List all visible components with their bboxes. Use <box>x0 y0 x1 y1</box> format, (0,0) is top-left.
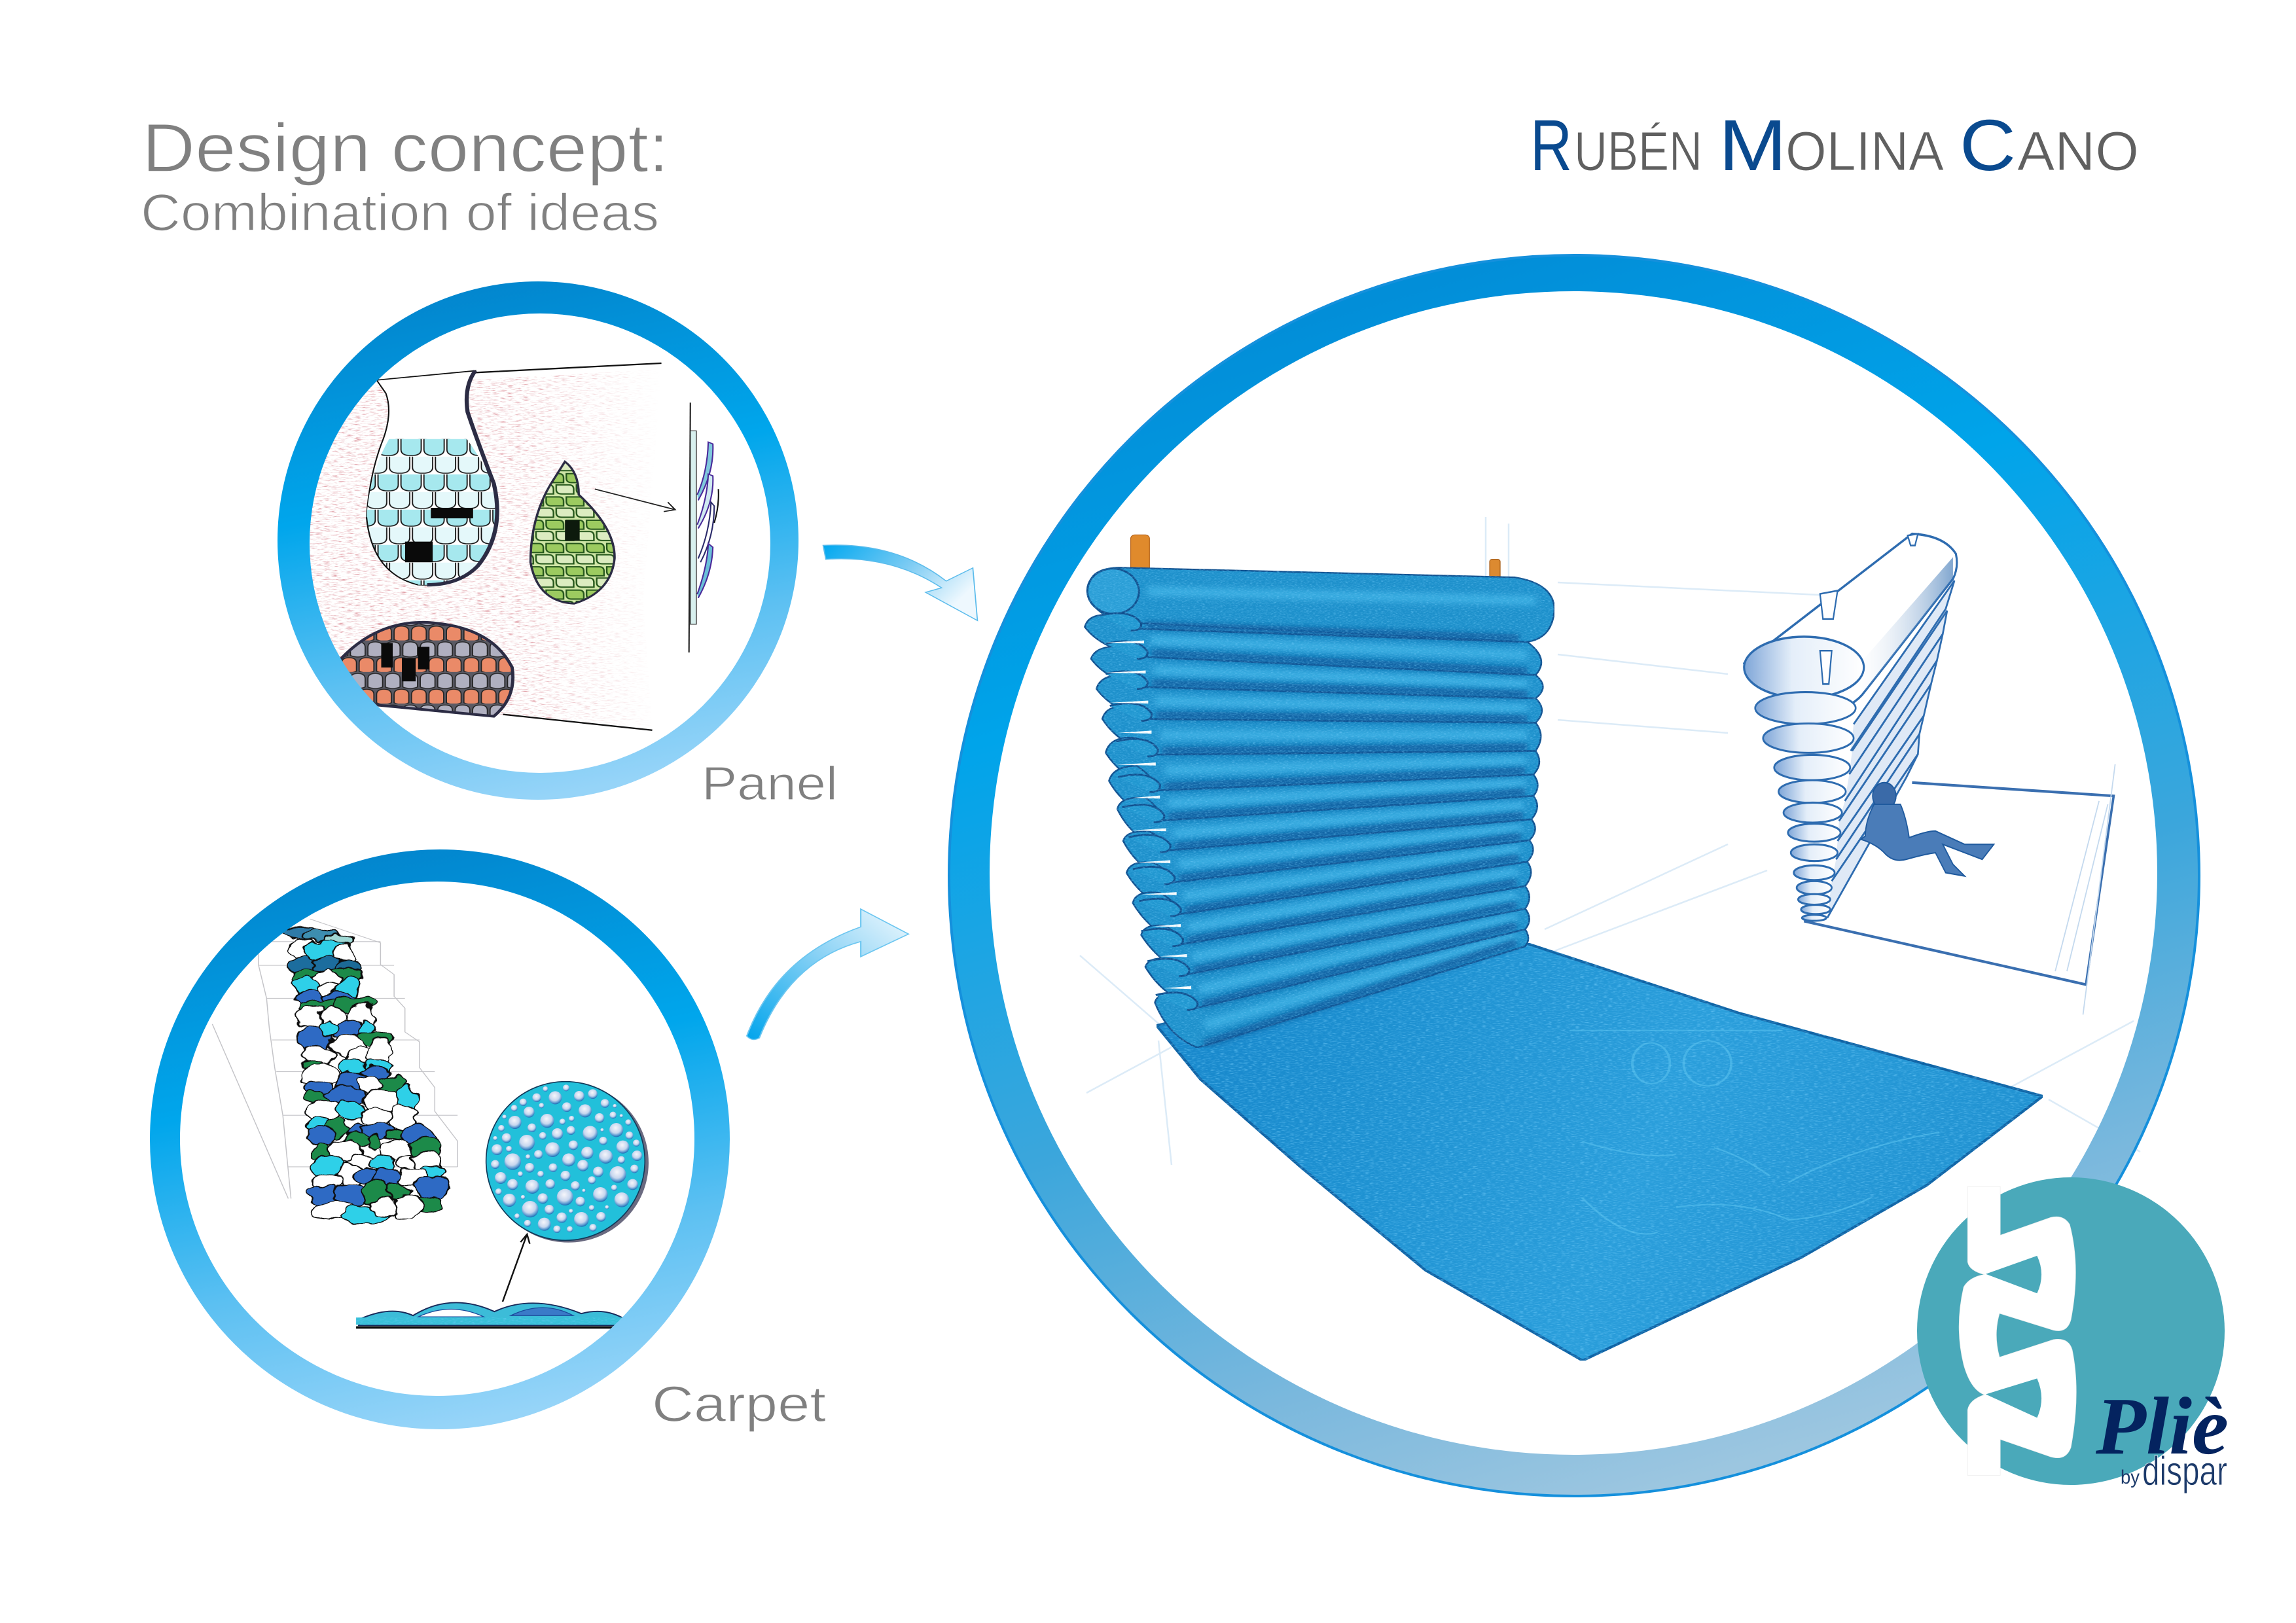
roll end and fold eyes <box>1081 562 1146 620</box>
ring: carpet circle <box>150 849 730 1429</box>
teal scale drop <box>367 370 497 585</box>
arrow to elevation <box>595 489 675 512</box>
logo byline by: by <box>2121 1467 2140 1488</box>
folded wall tubes <box>1081 562 1554 1048</box>
author name: UBÉN <box>1574 120 1702 182</box>
carpet cross-section <box>356 1302 622 1329</box>
room floor outline <box>1804 783 2113 984</box>
wall pegs <box>1131 535 1500 580</box>
white slits between folds <box>1105 641 1191 989</box>
side elevation <box>689 402 719 652</box>
panel: carpet concept sketch <box>150 849 730 1429</box>
ring: panel circle <box>278 281 798 800</box>
right-hand small perspective sketch <box>1744 534 2115 1014</box>
top roll <box>1744 534 1957 711</box>
seated figure <box>1861 783 1994 876</box>
green scale drop <box>531 461 615 603</box>
author name: ANO <box>2017 120 2139 182</box>
pink pencil wall wash <box>308 369 662 728</box>
logo: Plie by dispar <box>1917 1177 2229 1494</box>
red and grey scale shape <box>340 622 513 717</box>
zoom arrow <box>503 1234 529 1302</box>
author name: M <box>1719 105 1787 186</box>
logo byline dispar: dispar <box>2142 1449 2227 1494</box>
subtitle: Combination of ideas: Combination of ideas <box>141 183 659 241</box>
patchwork runner <box>281 927 452 1224</box>
arrow: carpet to main concept <box>747 909 908 1039</box>
dark shading above seams <box>1145 625 1527 1044</box>
logo wordmark: Pliè <box>2095 1382 2229 1472</box>
crisp fold seams <box>1139 629 1535 1048</box>
logo disc <box>1917 1177 2225 1485</box>
textured disc with bubbles <box>486 1082 649 1243</box>
logo folded S mark <box>1959 1186 2076 1475</box>
staircase lines <box>212 919 457 1198</box>
floor relief swirls <box>1570 1031 1939 1234</box>
title: Design concept: Design concept: <box>142 110 669 187</box>
illustration: stair runner and texture <box>212 919 649 1329</box>
author name: R <box>1530 105 1572 186</box>
author name: C <box>1960 105 2016 186</box>
author name <box>1530 105 2139 186</box>
light bands along tubes <box>1147 591 1535 1025</box>
author name: OLINA <box>1785 120 1944 182</box>
illustration: wall panel drawing <box>308 363 719 730</box>
panel: panel concept sketch <box>278 281 798 800</box>
ring: main circle <box>949 255 2199 1496</box>
panel: main concept drawing <box>949 255 2199 1496</box>
label: Carpet: Carpet <box>652 1376 826 1433</box>
stacked folds <box>1827 580 1954 918</box>
floor carpet <box>1157 943 2043 1361</box>
faint construction lines <box>1080 517 2140 1165</box>
label: Panel: Panel <box>702 758 838 810</box>
arrow: panel to main concept <box>823 545 977 620</box>
